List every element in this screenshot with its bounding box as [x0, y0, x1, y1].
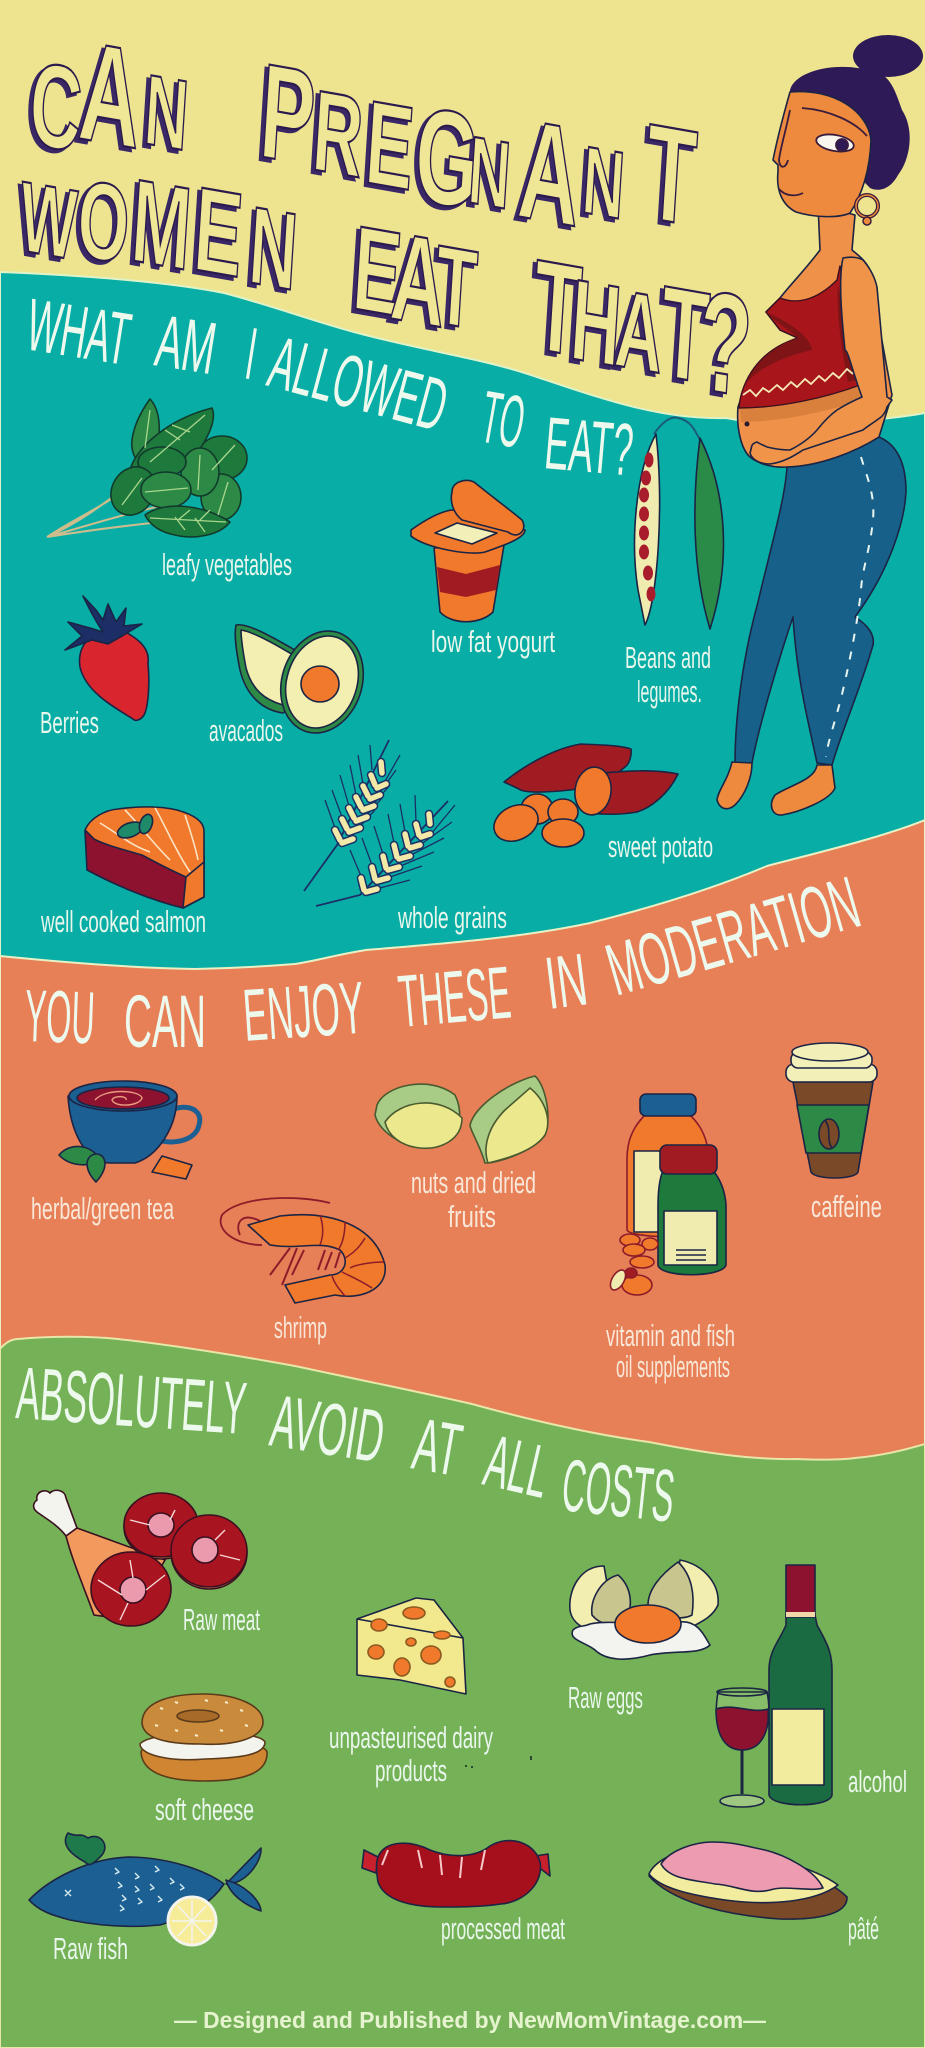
label: pâté: pâté — [848, 1911, 879, 1946]
seam stitching — [826, 457, 873, 757]
label: berries: Berries — [40, 705, 99, 740]
heading: you can enjoy these in moderation: CAN — [124, 980, 206, 1063]
title: E — [190, 160, 247, 303]
title: N — [246, 184, 301, 314]
label: beans and legumes — [625, 640, 711, 709]
icon: soft cheese bagel — [140, 1694, 267, 1781]
red top — [739, 266, 860, 408]
label: herbal/green tea: herbal/green tea — [31, 1191, 174, 1226]
title: E — [349, 199, 406, 342]
legs in blue leggings — [735, 437, 906, 765]
heading: absolutely avoid at all costs: ABSOLUTELY — [14, 1351, 249, 1450]
icon: raw meat — [34, 1490, 247, 1626]
title: A — [75, 11, 146, 179]
hair bun — [853, 35, 923, 77]
panel: allowed foods — [0, 272, 925, 1000]
icon: whole grains — [304, 740, 455, 906]
heading: you can enjoy these in moderation: ENJOY — [240, 966, 367, 1057]
title: T — [656, 258, 713, 411]
heading: what am I allowed to eat: ALLOWED — [261, 320, 456, 447]
belly button — [744, 422, 750, 426]
heading: absolutely avoid at all costs — [14, 1351, 678, 1538]
icon: raw eggs — [570, 1560, 718, 1659]
label: nuts and dried fruits: nuts and dried — [411, 1165, 536, 1200]
icon: strawberry — [65, 596, 149, 720]
heading: what am I allowed to eat: EAT? — [542, 401, 637, 492]
illustration: pregnant woman — [717, 35, 923, 815]
title: W — [17, 161, 80, 282]
heading: what am I allowed to eat: TO — [475, 375, 531, 464]
title: G — [411, 77, 483, 239]
icon: wine bottle and glass — [716, 1565, 832, 1807]
label: vitamin and fish oil supplements: oil supplements — [616, 1349, 730, 1384]
title: N — [580, 125, 628, 240]
heading: you can enjoy these in moderation: IN — [541, 938, 592, 1025]
label: unpasteurised dairy products: products — [375, 1753, 447, 1788]
title: P — [256, 34, 319, 194]
title: H — [567, 255, 625, 392]
icon: vitamin and fish oil bottles — [607, 1094, 726, 1295]
title: O — [74, 157, 133, 288]
heading: what am I allowed to eat: I — [240, 312, 262, 395]
hair — [790, 67, 910, 190]
earring — [856, 195, 878, 225]
title: M — [128, 154, 195, 296]
label: leafy vegetables: leafy vegetables — [162, 547, 292, 582]
title: A — [514, 89, 585, 257]
label: caffeine: caffeine — [811, 1189, 882, 1224]
heading: what am I allowed to eat: AM — [150, 299, 222, 390]
label: vitamin and fish oil supplements — [606, 1318, 735, 1384]
title — [17, 11, 756, 427]
label: well cooked salmon: well cooked salmon — [40, 904, 206, 939]
facial features — [779, 108, 867, 195]
panel: avoid foods — [0, 1337, 925, 2048]
text: COSTS — [558, 1443, 678, 1538]
footer credit: — Designed and Published by NewMomVintage.com— — [174, 2007, 766, 2033]
title: A — [387, 206, 450, 354]
heading: you can enjoy these in moderation: THESE — [395, 950, 514, 1043]
label: raw fish: Raw fish — [53, 1931, 128, 1966]
heading: you can enjoy these in moderation — [23, 860, 868, 1063]
title: T — [432, 221, 480, 353]
icon: low fat yogurt — [411, 480, 525, 622]
icon: cheese wedge — [357, 1598, 466, 1694]
title: R — [309, 66, 367, 203]
face — [773, 92, 871, 217]
label: sweet potato: sweet potato — [608, 829, 713, 864]
title: ? — [694, 259, 756, 427]
label: avacados: avacados — [209, 713, 283, 748]
heading: absolutely avoid at all costs: ALL — [477, 1419, 557, 1514]
label: raw meat: Raw meat — [183, 1602, 260, 1637]
title: T — [641, 94, 701, 255]
icon: coffee cup — [786, 1043, 877, 1178]
torso skin — [738, 205, 892, 467]
heading: you can enjoy these in moderation: YOU — [23, 974, 96, 1059]
icon: sweet potato — [488, 744, 678, 848]
title: N — [466, 115, 514, 230]
icon: shrimp — [221, 1198, 385, 1303]
left foot with sandal — [717, 762, 752, 809]
icon: herbal tea cup — [59, 1081, 200, 1182]
title: C — [26, 36, 86, 177]
zigzag pattern — [743, 369, 853, 396]
label: nuts and dried fruits: fruits — [448, 1199, 496, 1234]
label: unpasteurised dairy products — [329, 1720, 493, 1788]
label: unpasteurised dairy products: unpasteurised dairy — [329, 1720, 493, 1755]
icon: nuts and dried fruits — [375, 1076, 548, 1163]
label: beans and legumes: Beans and — [625, 640, 711, 675]
label: soft cheese: soft cheese — [155, 1792, 254, 1827]
icon: pâté on toast — [649, 1842, 847, 1919]
icon: salmon steak — [85, 807, 204, 908]
panel: title background — [0, 0, 925, 500]
icon: processed meat sausage — [362, 1841, 550, 1907]
specks near products — [466, 1756, 531, 1768]
title: N — [141, 54, 192, 172]
top shading — [745, 285, 858, 385]
panel: moderation foods — [0, 820, 925, 1500]
icon: leafy vegetables — [47, 399, 247, 537]
label: whole grains: whole grains — [397, 900, 507, 935]
label: beans and legumes: legumes. — [637, 674, 702, 709]
arm cradling belly — [750, 257, 892, 464]
label: raw eggs: Raw eggs — [568, 1680, 643, 1715]
title: A — [612, 267, 667, 397]
heading: absolutely avoid at all costs: AVOID — [265, 1379, 390, 1478]
right foot with sandal — [771, 765, 835, 815]
title: E — [362, 75, 418, 216]
heading: what am I allowed to eat: WHAT — [21, 283, 136, 381]
heading: what am I allowed to eat — [21, 283, 637, 492]
label: vitamin and fish oil supplements: vitamin and fish — [606, 1318, 735, 1353]
heading: absolutely avoid at all costs: AT — [407, 1402, 468, 1492]
label: low fat yogurt: low fat yogurt — [431, 624, 555, 659]
icon: avocado — [235, 620, 376, 744]
shadow band below top — [740, 385, 862, 422]
label: processed meat: processed meat — [441, 1911, 565, 1946]
label: nuts and dried fruits — [411, 1165, 536, 1234]
icon: raw fish — [29, 1833, 261, 1945]
title: T — [529, 232, 585, 384]
label: shrimp: shrimp — [274, 1310, 327, 1345]
icon: beans and legumes — [635, 417, 723, 629]
